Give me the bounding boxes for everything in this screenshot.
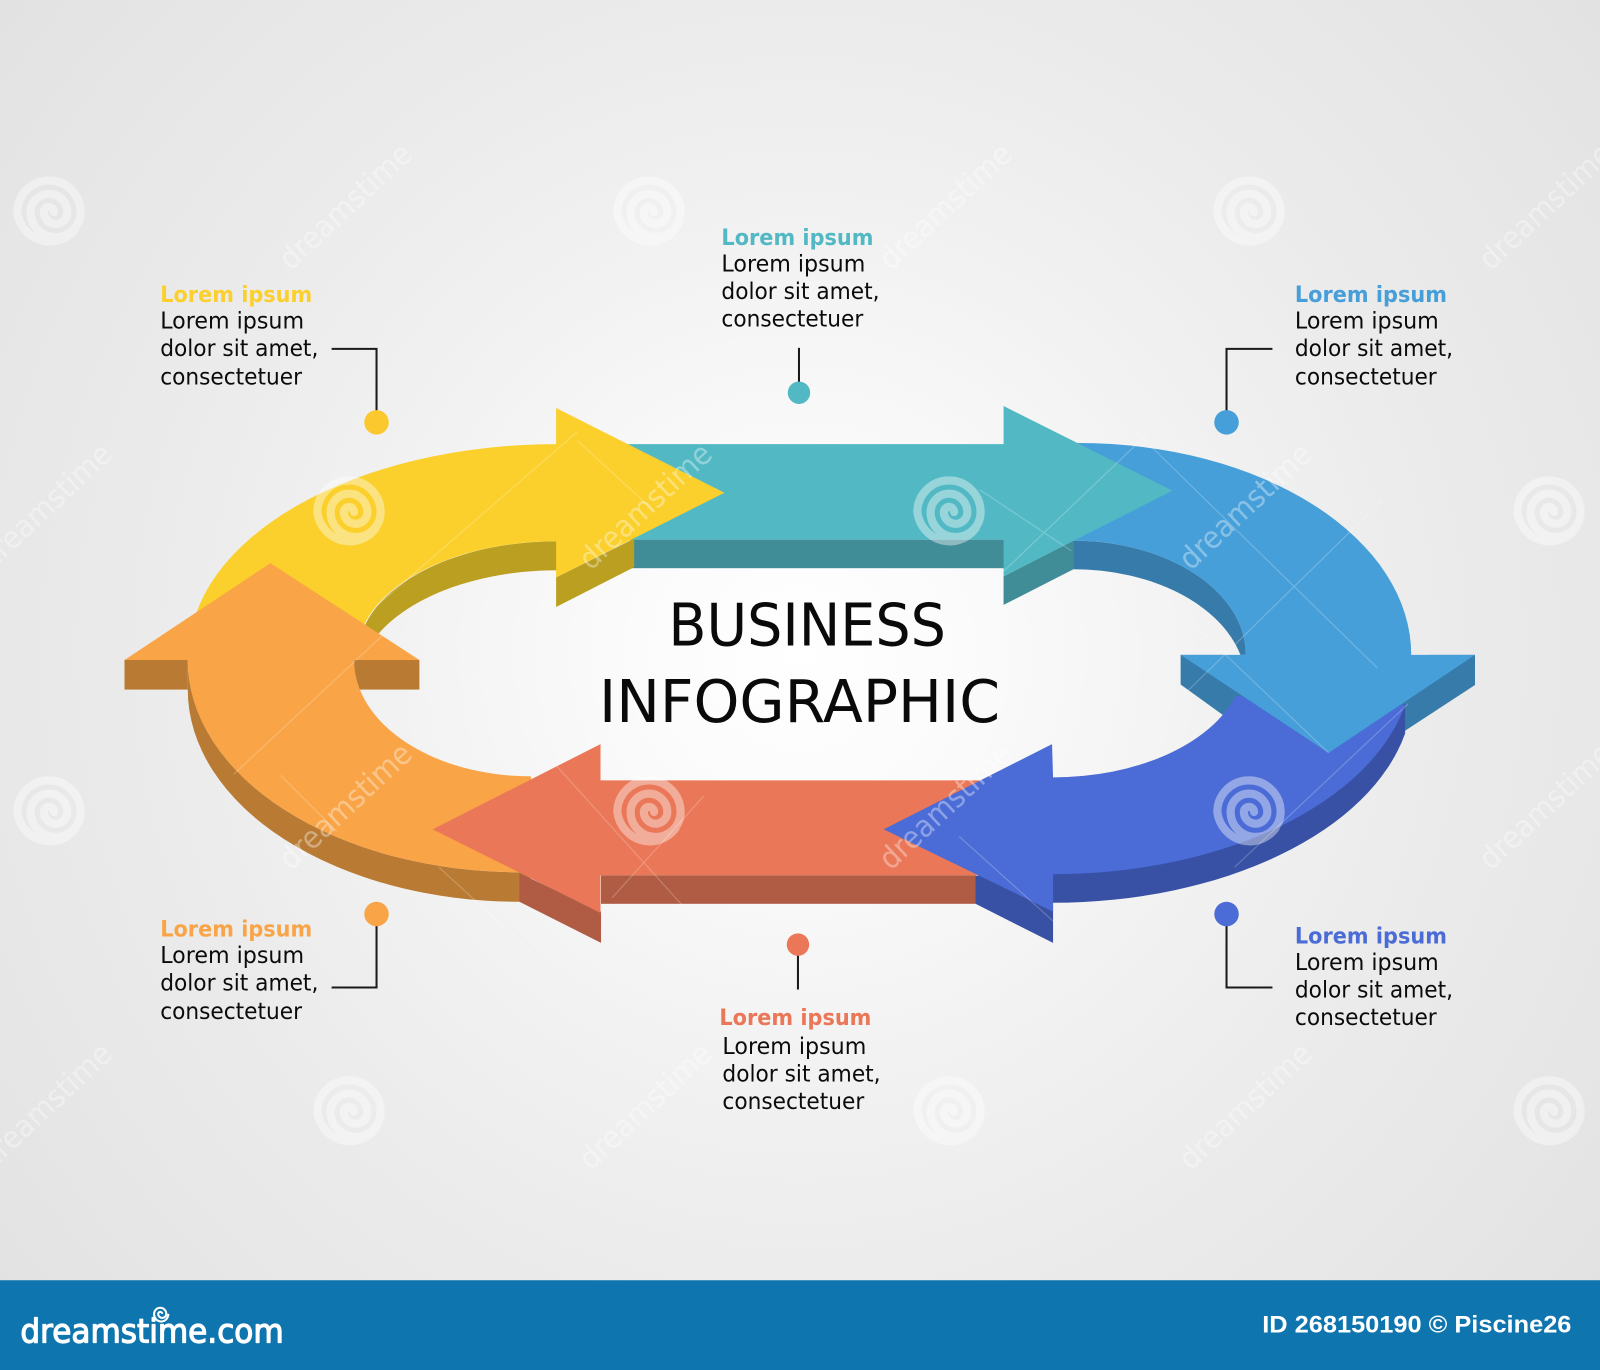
watermark text: dreamstime: [572, 1037, 719, 1177]
callout: teal top centre: consectetuer: [721, 306, 864, 332]
callout: blue top right: consectetuer: [1295, 365, 1437, 391]
callout: teal top centre: Lorem ipsum: [721, 225, 873, 251]
callout: blue top right: Lorem ipsum: [1295, 308, 1439, 334]
callout: orange bottom left: Lorem ipsum: [160, 943, 304, 969]
arrow 7: teal straight arrow pointing right: [612, 406, 1172, 605]
watermark text: dreamstime: [272, 137, 419, 277]
callout: indigo bottom right: consectetuer: [1295, 1005, 1437, 1031]
title: BUSINESS: [668, 591, 946, 660]
callout: indigo bottom right: dolor sit amet,: [1295, 978, 1453, 1004]
watermark text: dreamstime: [872, 137, 1019, 277]
watermark text: dreamstime: [572, 437, 719, 577]
watermark text: dreamstime: [272, 737, 419, 877]
arrow 5: indigo curved arrow pointing left: [884, 696, 1405, 943]
callout: yellow top left: consectetuer: [160, 365, 303, 391]
callout: teal top centre: [721, 225, 880, 404]
callout: yellow top left: [160, 282, 389, 435]
callout: teal top centre: dolor sit amet,: [721, 279, 880, 305]
watermark text: [0, 137, 1600, 1177]
arrow 4 walls: blue arrow head side faces: [1181, 655, 1475, 731]
callout: blue top right: [1214, 282, 1453, 435]
watermark text: dreamstime: [1172, 437, 1319, 577]
title: [599, 591, 1000, 736]
arrow 1 body: yellow curved shaft: [189, 444, 557, 661]
watermark spirals: [17, 181, 1581, 1141]
callout: orange bottom left: dolor sit amet,: [160, 971, 318, 997]
footer credit: ID 268150190 © Piscine26: [1262, 1311, 1571, 1338]
callout: red bottom centre: Lorem ipsum: [719, 1005, 871, 1031]
watermark text: dreamstime: [1172, 1037, 1319, 1177]
callout: teal top centre: Lorem ipsum: [721, 251, 865, 277]
callout: blue top right: Lorem ipsum: [1295, 282, 1447, 308]
callout: indigo bottom right: [1214, 902, 1453, 1031]
arrow 1 head: yellow arrow head: [556, 408, 724, 607]
callout: yellow top left: Lorem ipsum: [160, 282, 312, 308]
callout: indigo bottom right: Lorem ipsum: [1295, 950, 1439, 976]
callout: orange bottom left: Lorem ipsum: [160, 916, 312, 942]
arrow 2: orange curved arrow pointing up: [124, 563, 541, 902]
watermark text: dreamstime: [872, 737, 1019, 877]
callout: orange bottom left: [160, 902, 389, 1025]
footer logo: dreamstime.com: [20, 1312, 284, 1350]
callout: red bottom centre: consectetuer: [722, 1089, 865, 1115]
footer bar: [0, 1280, 1600, 1370]
callout: indigo bottom right: Lorem ipsum: [1295, 924, 1447, 950]
arrow 6: blue curved arrow pointing down: [1071, 443, 1475, 753]
cycle diagram: six 3D arrows: [124, 406, 1475, 943]
callout: red bottom centre: [719, 933, 881, 1115]
callout: blue top right: dolor sit amet,: [1295, 336, 1453, 362]
callout: yellow top left: Lorem ipsum: [160, 308, 304, 334]
callout: red bottom centre: dolor sit amet,: [722, 1061, 881, 1087]
callout: yellow top left: dolor sit amet,: [160, 336, 318, 362]
title: INFOGRAPHIC: [599, 667, 1000, 736]
callout: red bottom centre: Lorem ipsum: [722, 1034, 866, 1060]
diagonal watermark lines: [234, 428, 1408, 979]
arrow 3: red straight arrow pointing left: [433, 744, 980, 943]
callout: orange bottom left: consectetuer: [160, 999, 303, 1025]
